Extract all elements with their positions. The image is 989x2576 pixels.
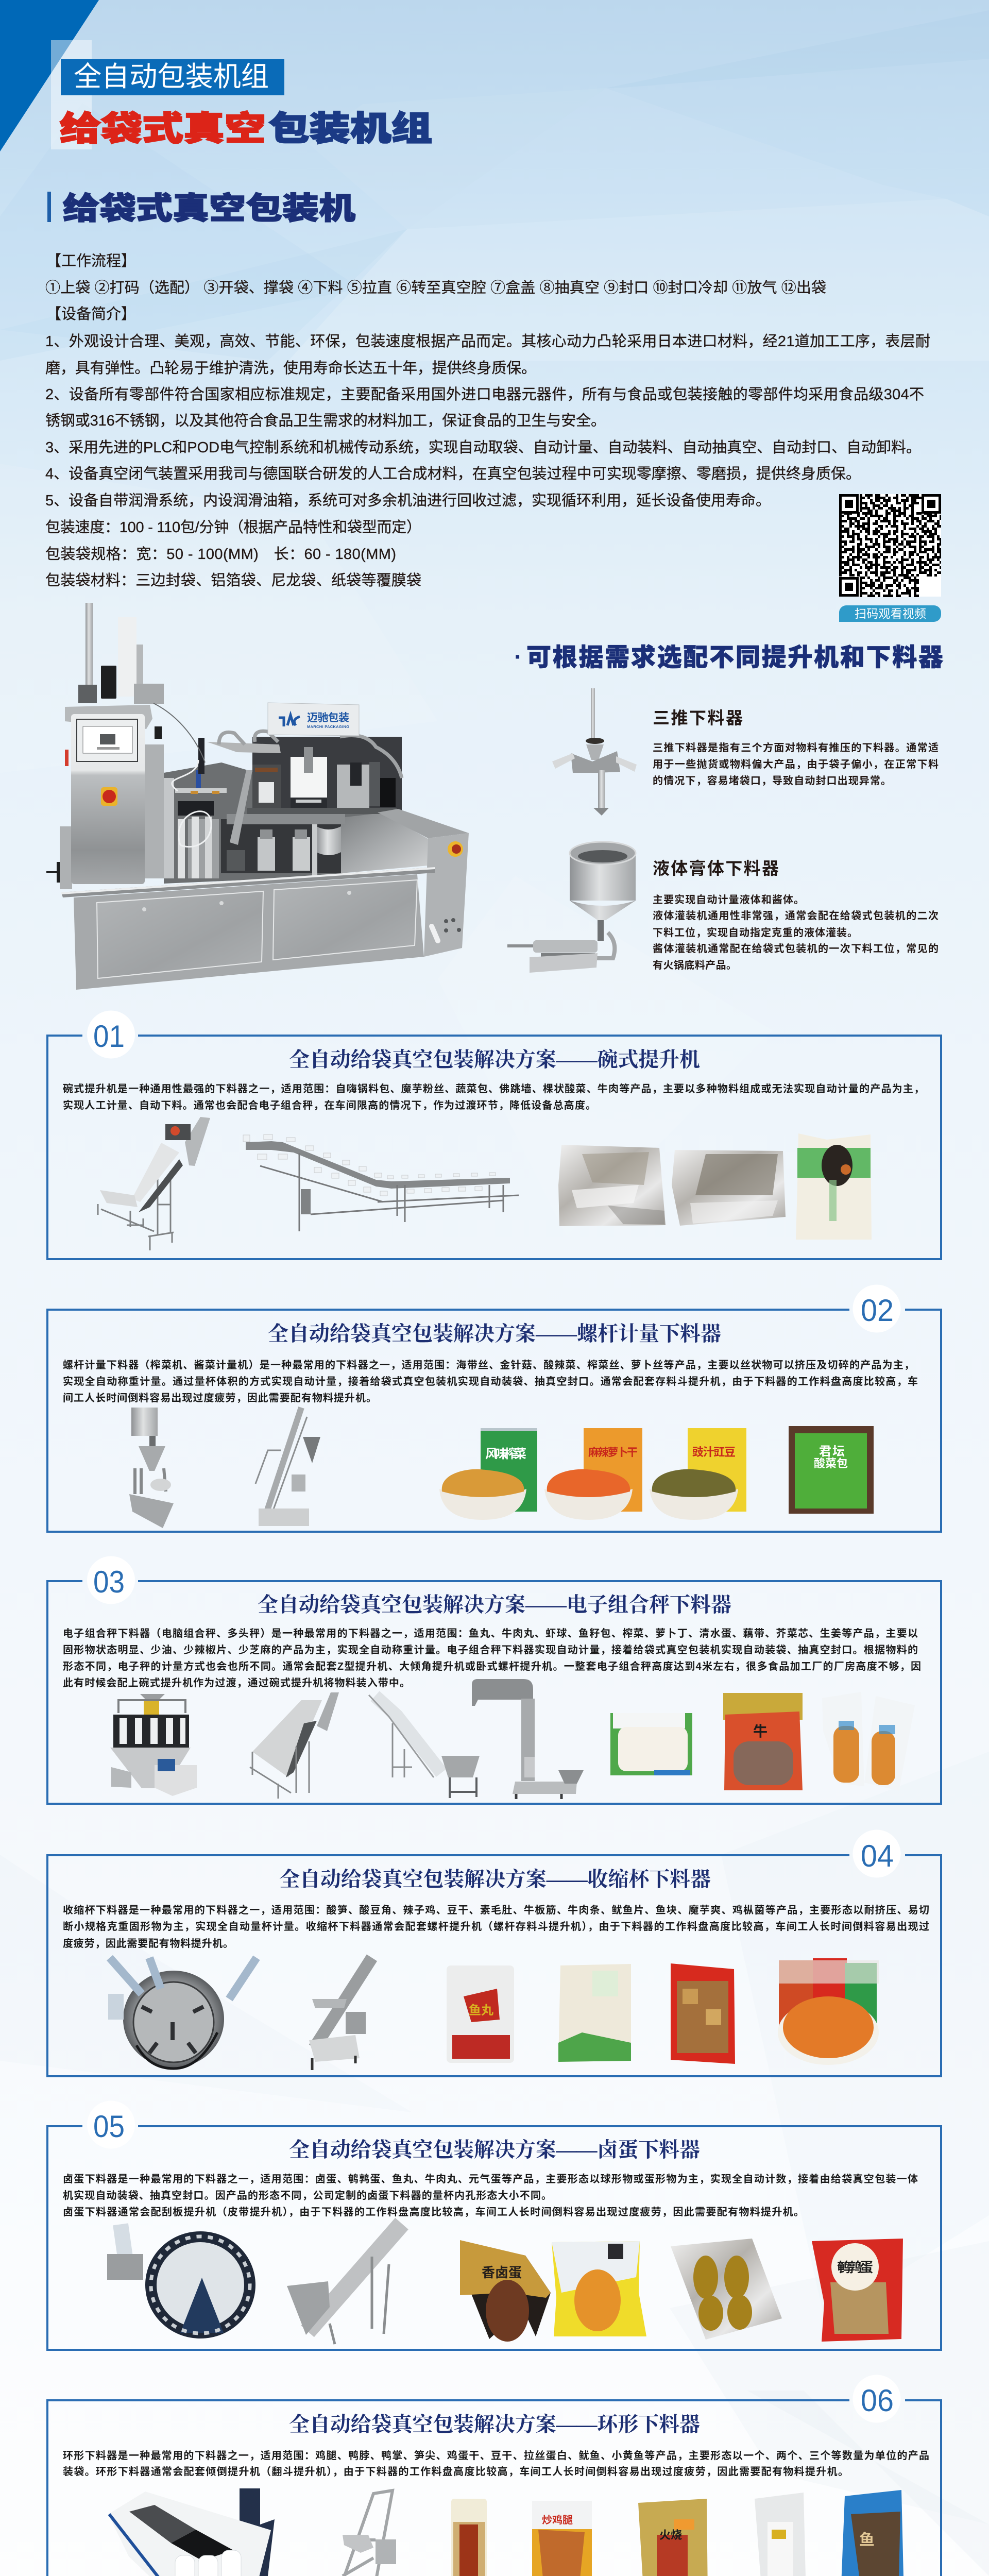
image: beef ball bag: 牛: [753, 1723, 768, 1739]
number badge 04: 04: [861, 1839, 894, 1873]
panel description: 卤蛋下料器通常会配刮板提升机（皮带提升机），由于下料器的工作料盘高度比较高，车间工人长时间倒料容易出现过度疲劳，因此需要配有物料提升机。: [63, 2206, 804, 2218]
image: ring feeder conveyor: [108, 2488, 275, 2576]
liquid paste feeder description: 有火锅底料产品。: [653, 959, 737, 971]
panel description: 固形物状态明显、少油、少辣椒片、少芝麻的产品为主，实现全自动称重计量。电子组合秤下料器实现自动计量，接着给袋式真空包装机实现自动装袋、抽真空封口。根据物料的: [63, 1643, 918, 1656]
workflow and specification text: 【工作流程】: [46, 252, 136, 269]
image: pickle bag 3 with bowl: [650, 1428, 746, 1520]
panel 04: shrink cup feeder: [47, 1830, 941, 2076]
image: bucket elevator: [472, 1679, 584, 1799]
panel description: 碗式提升机是一种通用性最强的下料器之一，适用范围：自嗨锅料包、魔芋粉丝、蔬菜包、佛跳墙、棵状酸菜、牛肉等产品，主要以多种物料组成或无法实现自动计量的产品为主，: [63, 1082, 924, 1095]
panel description: [63, 2173, 918, 2218]
image: shrink cup wheel: [108, 1958, 257, 2069]
number badge 03: 03: [93, 1565, 125, 1599]
number badge 03: [87, 1556, 135, 1604]
image: tipping lift: [329, 2490, 396, 2576]
upper carousel: [207, 731, 402, 814]
panel description: 电子组合秤下料器（电脑组合秤、多头秤）是一种最常用的下料器之一，适用范围：鱼丸、牛肉丸、虾球、鱼籽包、榨菜、萝卜丁、清水蛋、藕带、芥菜芯、生姜等产品，主要以: [63, 1627, 918, 1639]
panel description: 收缩杯下料器是一种最常用的下料器之一，适用范围：酸笋、酸豆角、辣子鸡、豆干、素毛肚、牛板筋、牛肉条、鱿鱼片、鱼块、魔芋爽、鸡枞菌等产品，主要形态以耐挤压、易切: [63, 1904, 929, 1916]
image: pickle bag 1 with bowl: [439, 1428, 537, 1520]
image: fish ball bag: [610, 1713, 692, 1775]
number badge 01: 01: [93, 1019, 125, 1054]
panel description: [63, 2449, 929, 2478]
image: duck neck bag: 炒鸡腿: [542, 2514, 573, 2526]
image: tall lift: [255, 1408, 320, 1526]
panel description: 实现全自动称重计量。通过量杯体积的方式实现自动计量，接着给袋式真空包装机实现自动装袋、抽真空封口。通常会配套存料斗提升机，由于下料器的工作料盘高度比较高，车: [63, 1375, 918, 1387]
number badge 02: 02: [861, 1293, 894, 1328]
panel description: [63, 1627, 921, 1689]
subtitle badge: 全自动包装机组: [74, 61, 269, 92]
panel frame: [47, 1581, 941, 1804]
workflow and specification text: [45, 252, 930, 589]
image: pickle bag 1 with bowl: 风味榨菜: [485, 1447, 526, 1461]
table slab: [61, 867, 435, 897]
panel description: 机实现自动装袋、抽真空封口。因产品的形态不同，公司定制的卤蛋下料器的量杯内孔形态大小不同。: [63, 2189, 552, 2201]
left control column: [46, 714, 164, 889]
liquid paste feeder description: 主要实现自动计量液体和酱体。: [653, 893, 804, 906]
panel description: 形态不同，电子秤的计量方式也会也所不同。通常会配套Z型提升机、大倾角提升机或卧式螺杆提升机。一整套电子组合秤高度达到4米左右，很多食品加工厂的厂房高度不够，因: [63, 1660, 921, 1672]
workflow and specification text: 包装袋材料：三边封袋、铝箔袋、尼龙袋、纸袋等覆膜袋: [45, 572, 421, 589]
panel 06: ring feeder: [47, 2375, 941, 2576]
image: green pickle bag: 酸菜包: [814, 1457, 848, 1470]
panel description: 卤蛋下料器是一种最常用的下料器之一，适用范围：卤蛋、鹌鹑蛋、鱼丸、牛肉丸、元气蛋等产品，主要形态以球形物或蛋形物为主，实现全自动计数，接着由给袋真空包装一体: [63, 2173, 918, 2185]
panel title: 全自动给袋真空包装解决方案——螺杆计量下料器: [268, 1322, 721, 1345]
icon: liquid paste feeder: [507, 842, 636, 973]
panel description: 度疲劳，因此需要配有物料提升机。: [63, 1937, 233, 1950]
liquid paste feeder description: 液体灌装机通用性非常强，通常会配在给袋式包装机的二次: [653, 910, 939, 922]
image: fish snack bag: [447, 1965, 514, 2063]
upper tubes and blocks: [65, 603, 164, 729]
liquid paste feeder description: 酱体灌装机通常配在给袋式包装机的一次下料工位，常见的: [653, 942, 939, 955]
workflow and specification text: 【设备简介】: [46, 306, 136, 323]
main title: 包装机组: [268, 110, 432, 147]
image: bowl elevator: [250, 1692, 339, 1799]
workflow and specification text: 包装袋规格：宽：50 - 100(MM) 长：60 - 180(MM): [45, 546, 396, 563]
number badge 06: 06: [861, 2383, 894, 2418]
liquid paste feeder description: 下料工位，实现自动指定克重的液体灌装。: [653, 926, 858, 939]
panel description: 此有时候会配上碗式提升机作为过渡，通过碗式提升机将物料装入带中。: [63, 1676, 410, 1689]
image: blue fish bag: [841, 2490, 904, 2576]
number badge 02: [853, 1285, 900, 1332]
image: gold duck bag: 火烧: [659, 2529, 682, 2541]
heading: optional lifts and feeders: 可根据需求选配不同提升机和下料器: [526, 644, 943, 671]
image: foil bag 1: [558, 1145, 666, 1226]
image: braised egg gold bag: 香卤蛋: [482, 2265, 522, 2280]
image: silver egg bag: [671, 2239, 782, 2340]
panel description: [63, 1904, 929, 1950]
image: gold duck bag: [638, 2499, 708, 2576]
panel description: [63, 1359, 918, 1404]
image: green pickle bag: 君坛: [819, 1445, 845, 1459]
QR code: [839, 494, 941, 597]
image: red quail egg bag: 鹌鹑蛋: [837, 2260, 873, 2275]
workflow and specification text: 3、采用先进的PLC和POD电气控制系统和机械传动系统，实现自动取袋、自动计量、自动装料、自动抽真空、自动封口、自动卸料。: [45, 439, 921, 456]
panel 03: electronic combination scale: [47, 1556, 941, 1804]
translucent header strip: [51, 40, 92, 149]
scan-to-watch button: [839, 605, 941, 622]
workflow and specification text: 1、外观设计合理、美观，高效、节能、环保，包装速度根据产品而定。其核心动力凸轮采用日本进口材料，经21道加工工序，表层耐: [45, 333, 930, 350]
panel frame: [47, 2126, 941, 2350]
image: white vegetable bag: [558, 1964, 631, 2062]
image: green pickle bag: [789, 1426, 874, 1514]
number badge 05: [87, 2101, 135, 2148]
three-push feeder description: 三推下料器: [653, 708, 743, 727]
image: red tofu bag: [671, 1963, 735, 2064]
three-push feeder description: [653, 708, 939, 787]
right housing: [378, 809, 469, 957]
three-push feeder description: 三推下料器是指有三个方面对物料有推压的下料器。通常适: [653, 741, 939, 754]
section heading: bag-feeding vacuum packer: 给袋式真空包装机: [63, 191, 355, 226]
number badge 04: [853, 1830, 900, 1877]
panel title: 全自动给袋真空包装解决方案——卤蛋下料器: [289, 2138, 700, 2161]
image: pickle bag 2 with bowl: [544, 1428, 642, 1520]
image: screw feeder: [129, 1408, 174, 1528]
image: konjac bags with bowl: [778, 1958, 879, 2065]
main title: 给袋式真空: [60, 110, 266, 147]
three-push feeder description: 用于一些抛货或物料偏大产品，由于袋子偏小，在正常下料: [653, 758, 939, 770]
image: pickle bag 3 with bowl: 豉汁豇豆: [692, 1446, 736, 1459]
panel title: 全自动给袋真空包装解决方案——电子组合秤下料器: [258, 1593, 731, 1616]
image: white vacuum bag: [755, 2493, 806, 2576]
main title: [60, 110, 432, 147]
number badge 05: 05: [93, 2109, 125, 2144]
image: yellow egg bag: [552, 2241, 646, 2336]
icon: three-push feeder: [552, 688, 637, 816]
heading: optional lifts and feeders: ·: [514, 643, 522, 671]
panel title: 全自动给袋真空包装解决方案——收缩杯下料器: [279, 1868, 711, 1891]
logo sign: [268, 703, 359, 736]
logo sign: MARCHI PACKAGING: [307, 724, 349, 729]
image: incline cleated conveyor: [369, 1695, 480, 1798]
workflow and specification text: 磨，具有弹性。凸轮易于维护清洗，使用寿命长达五十年，提供终身质保。: [45, 360, 536, 377]
panel description: 间工人长时间倒料容易出现过度疲劳，因此需要配有物料提升机。: [63, 1392, 377, 1404]
panel description: [63, 1082, 924, 1111]
workflow and specification text: 2、设备所有零部件符合国家相应标准规定，主要配备采用国外进口电器元器件，所有与食品或包装接触的零部件均采用食品级304不: [45, 386, 924, 403]
panel description: 断小规格克重固形物为主，实现全自动量杯计量。收缩杯下料器通常会配套螺杆提升机（螺杆存料斗提升机），由于下料器的工作料盘高度比较高，车间工人长时间倒料容易出现过: [63, 1920, 929, 1933]
image: bowl elevator: [98, 1117, 210, 1250]
panel frame: [47, 1855, 941, 2076]
image: multihead weigher: [110, 1694, 197, 1796]
image: white and orange bags: [822, 1692, 915, 1791]
panel frame: [47, 1310, 941, 1532]
corner blue wedge: [0, 0, 99, 151]
liquid paste feeder description: [653, 859, 939, 971]
panel 02: screw metering feeder: [47, 1285, 941, 1532]
panel frame: [47, 1036, 941, 1259]
lower cabinet: [74, 874, 461, 990]
image: red quail egg bag: [812, 2239, 903, 2342]
panel 01: bowl lift: [47, 1011, 941, 1259]
workflow and specification text: 5、设备自带润滑系统，内设润滑油箱，系统可对多余机油进行回收过滤，实现循环利用，延长设备使用寿命。: [45, 492, 771, 509]
workflow and specification text: 锈钢或316不锈钢，以及其他符合食品卫生需求的材料加工，保证食品的卫生与安全。: [45, 412, 606, 429]
image: chicken leg bag: [451, 2499, 487, 2576]
panel description: 环形下料器是一种最常用的下料器之一，适用范围：鸡腿、鸭脖、鸭掌、笋尖、鸡蛋干、豆干、拉丝蛋白、鱿鱼、小黄鱼等产品，主要形态以一个、两个、三个等数量为单位的产品: [63, 2449, 929, 2462]
three-push feeder description: 的情况下，容易堵袋口，导致自动封口出现异常。: [653, 774, 891, 787]
logo sign: 迈驰包装: [307, 712, 349, 724]
image: fish snack bag: 鱼丸: [469, 2004, 493, 2018]
panel title: 全自动给袋真空包装解决方案——碗式提升机: [289, 1048, 700, 1071]
lower left tubes: [154, 703, 227, 878]
panel 05: braised egg feeder: [47, 2101, 941, 2350]
image: incline conveyor: [243, 1134, 519, 1231]
liquid paste feeder description: 液体膏体下料器: [653, 859, 779, 878]
workflow and specification text: ①上袋 ②打码（选配） ③开袋、撑袋 ④下料 ⑤拉直 ⑥转至真空腔 ⑦盒盖 ⑧抽真空 ⑨封口 ⑩封口冷却 ⑪放气 ⑫出袋: [45, 279, 826, 296]
panel title: 全自动给袋真空包装解决方案——环形下料器: [289, 2413, 700, 2436]
image: pickle bag 2 with bowl: 麻辣萝卜干: [588, 1446, 638, 1459]
image: braised egg gold bag: [460, 2240, 551, 2342]
number badge 06: [853, 2375, 900, 2422]
image: belt lift: [287, 2224, 402, 2344]
main vacuum packing machine: [46, 603, 469, 990]
number badge 01: [87, 1011, 135, 1058]
image: cup lift: [309, 1958, 372, 2070]
image: blue fish bag: 鱼: [859, 2532, 875, 2549]
panel frame: [47, 2400, 941, 2576]
scan-to-watch button: 扫码观看视频: [855, 607, 926, 620]
image: foil bag 2: [672, 1150, 786, 1226]
workflow and specification text: 4、设备真空闭气装置采用我司与德国联合研发的人工合成材料，在真空包装过程中可实现零摩擦、零磨损，提供终身质保。: [45, 465, 861, 482]
panel description: 装袋。环形下料器通常会配套倾倒提升机（翻斗提升机），由于下料器的工作料盘高度比较高，车间工人长时间倒料容易出现过度疲劳，因此需要配有物料提升机。: [63, 2465, 848, 2478]
workflow and specification text: 包装速度：100 - 110包/分钟（根据产品特性和袋型而定）: [45, 519, 421, 536]
image: noodle bag: [796, 1133, 872, 1240]
panel description: 螺杆计量下料器（榨菜机、酱菜计量机）是一种最常用的下料器之一，适用范围：海带丝、金针菇、酸辣菜、榨菜丝、萝卜丝等产品，主要以丝状物可以挤压及切碎的产品为主，: [63, 1359, 914, 1371]
mechanism bay: [154, 703, 428, 884]
lower centre assembly: [221, 770, 345, 876]
image: beef ball bag: [723, 1693, 803, 1790]
image: duck neck bag: [532, 2501, 592, 2576]
image: egg feeder wheel: [107, 2223, 255, 2338]
panel description: 实现人工计量、自动下料。通常也会配合电子组合秤，在车间限高的情况下，作为过渡环节，降低设备总高度。: [63, 1099, 596, 1111]
